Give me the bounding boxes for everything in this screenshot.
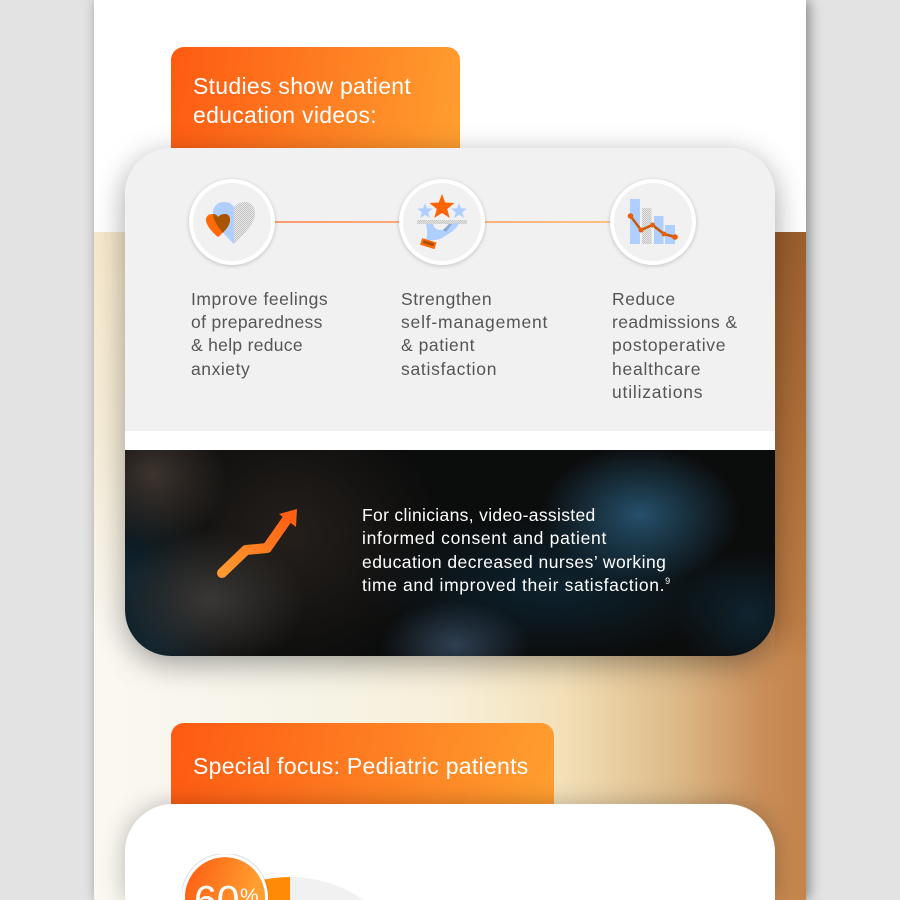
text: preparedness: anxiety [191,359,250,379]
icon: bar and line chart [610,179,696,265]
text: clinicians: informed consent and patient [362,528,607,548]
heading tab: studies [171,47,460,157]
panel: benefits [125,148,775,431]
text: readmissions: postoperative [612,335,726,355]
heading tab: pediatric [171,723,554,813]
white gap [125,431,775,450]
band tint right [775,232,806,662]
heading text: Special focus: Pediatric patients [193,753,529,779]
band tint left [94,232,154,632]
page sheet [94,0,806,900]
background band [94,232,806,900]
card shadow [125,148,775,656]
text: preparedness: of preparedness [191,312,323,332]
text: self-management: self-management [401,312,548,332]
heading text [193,73,411,128]
donut chart [264,877,364,900]
text: clinicians [362,505,670,595]
text: readmissions: Reduce [612,289,676,309]
text: self-management: Strengthen [401,289,492,309]
text: clinicians: education decreased nurses’ working [362,552,666,572]
text: preparedness: & help reduce [191,335,303,355]
stat badge: 60% [182,854,268,900]
panel: clinicians dark [125,450,775,656]
text: readmissions: healthcare [612,359,701,379]
text: self-management: satisfaction [401,359,497,379]
text: readmissions: readmissions & [612,312,738,332]
text: preparedness: Improve feelings [191,289,328,309]
heading text: education videos: [193,102,377,128]
icon: hearts [189,179,275,265]
text: readmissions: utilizations [612,382,703,402]
text: readmissions [612,289,738,402]
heading text: Studies show patient [193,73,411,99]
text: clinicians: For clinicians, video-assisted [362,505,596,525]
text: clinicians: time and improved their satisfaction.9 [362,575,670,595]
panel: pediatric card [125,804,775,900]
text: self-management [401,289,548,379]
icon: stars and hand [399,179,485,265]
text: preparedness [191,289,328,379]
text: self-management: & patient [401,335,475,355]
